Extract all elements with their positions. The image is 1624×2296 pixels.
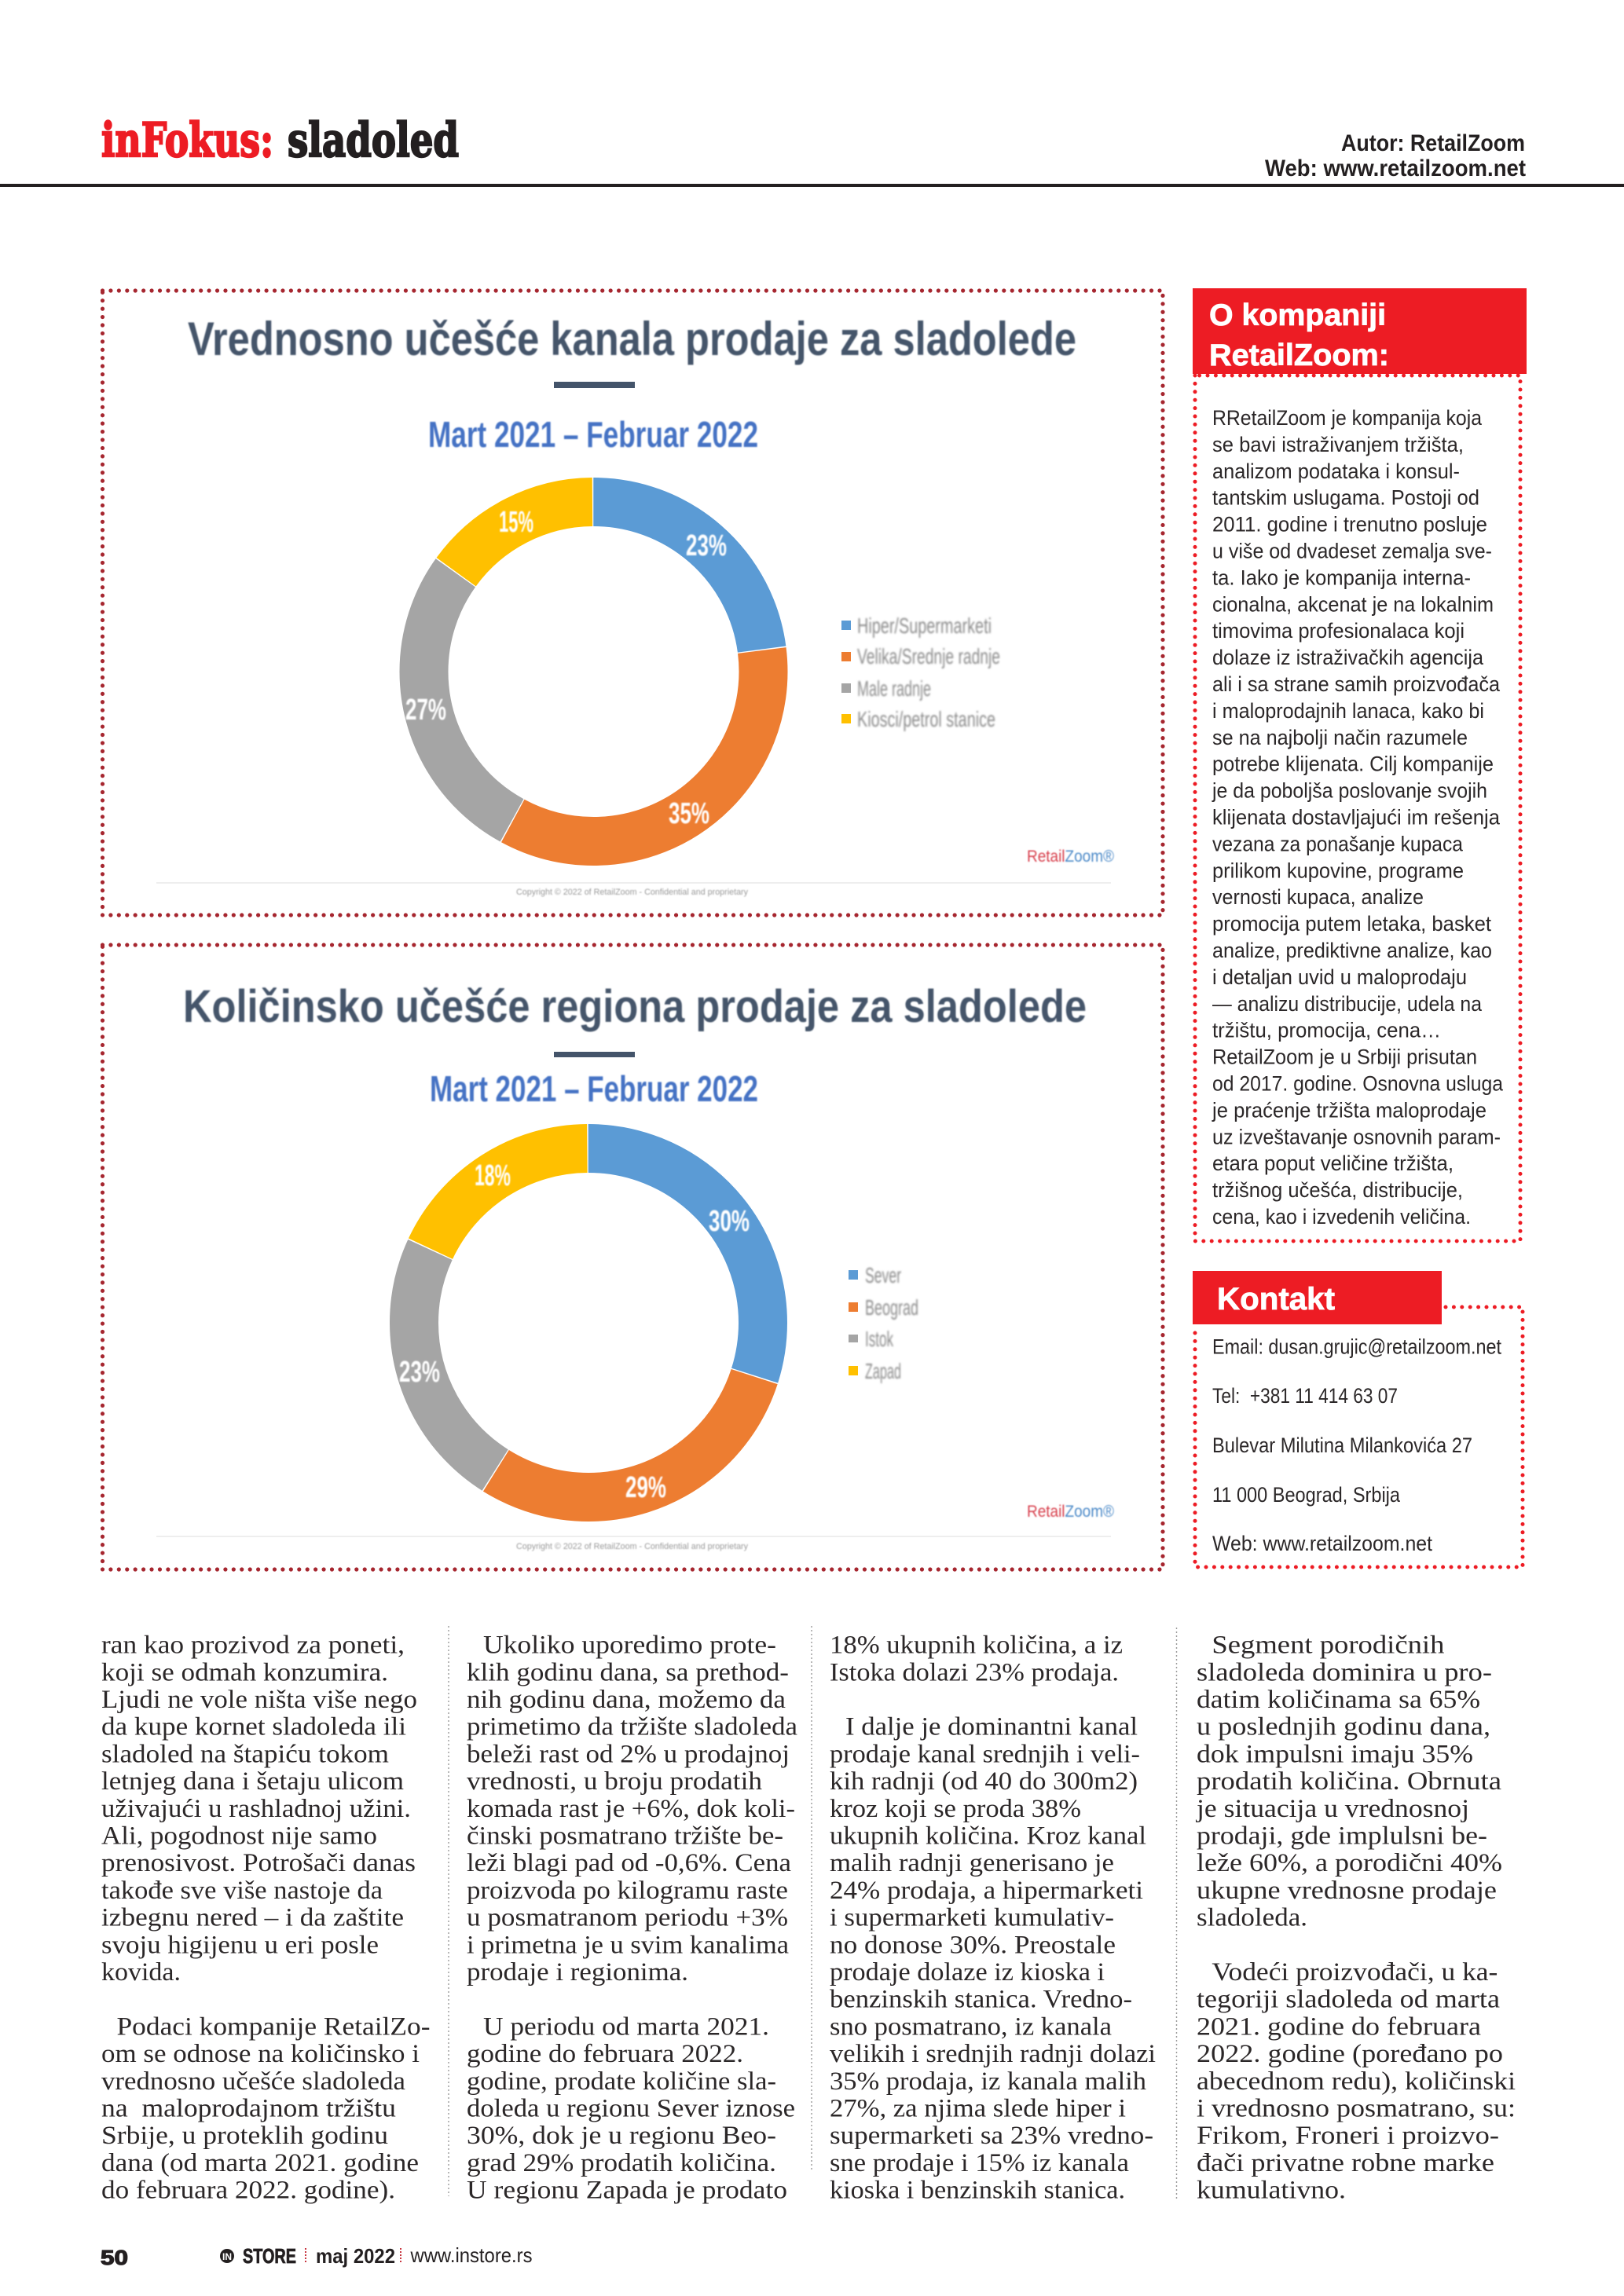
article column 4: i vrednosno posmatrano, su:	[1197, 2094, 1516, 2122]
article column 4: prodaji, gde implulsni be-	[1197, 1822, 1487, 1851]
sidebar body text: etara poput veličine tržišta,	[1212, 1152, 1454, 1175]
RetailZoom logo: RetailZoom®	[1027, 1503, 1114, 1521]
footer: publication line: STORE	[243, 2244, 296, 2268]
contact details: Bulevar Milutina Milankovića 27	[1212, 1434, 1472, 1457]
panel: volume share by region chart	[102, 945, 1163, 1569]
sidebar body text: analize, prediktivne analize, kao	[1212, 939, 1492, 962]
RetailZoom logo: RetailZoom®	[1027, 848, 1114, 866]
legend: channels: Velika/Srednje radnje	[857, 644, 1000, 668]
article column 1: kovida.	[101, 1958, 181, 1987]
article column 2: grad 29% prodatih količina.	[467, 2149, 776, 2177]
article column 1: Podaci kompanije RetailZo-	[116, 2012, 431, 2041]
copyright note: Copyright © 2022 of RetailZoom - Confidential and proprietary	[516, 888, 748, 897]
donut chart: channels	[405, 502, 764, 841]
article column 1: Srbije, u proteklih godinu	[101, 2122, 388, 2150]
article column 1: dana (od marta 2021. godine	[101, 2149, 419, 2177]
article column 1: om se odnose na količinsko i	[101, 2040, 420, 2068]
article column 4: abecednom redu), količinski	[1197, 2067, 1516, 2096]
contact details: Web: www.retailzoom.net	[1212, 1532, 1432, 1555]
sidebar body text: potrebe klijenata. Cilj kompanije	[1212, 753, 1494, 776]
article column 4: prodatih količina. Obrnuta	[1197, 1767, 1501, 1796]
article column 3: i supermarketi kumulativ-	[830, 1904, 1114, 1932]
article column 2: komada rast je +6%, dok koli-	[467, 1795, 795, 1823]
article column 2	[467, 1631, 797, 2205]
donut chart: regions	[399, 1148, 763, 1504]
sidebar heading: RetailZoom:	[1209, 339, 1389, 372]
article column 3: kroz koji se proda 38%	[830, 1795, 1081, 1823]
article column 3: Istoka dolazi 23% prodaja.	[830, 1658, 1119, 1686]
icon: IN logo: IN	[222, 2251, 232, 2262]
article column 4: kumulativno.	[1197, 2177, 1346, 2205]
donut chart: channels: 27%	[405, 694, 446, 727]
article column 1: vrednosno učešće sladoleda	[101, 2067, 405, 2096]
article column 1: letnjeg dana i šetaju ulicom	[101, 1767, 404, 1796]
sidebar body text: vernosti kupaca, analize	[1212, 885, 1424, 909]
article column 4: đači privatne robne marke	[1197, 2149, 1494, 2177]
sidebar body text: RetailZoom je u Srbiji prisutan	[1212, 1045, 1477, 1069]
article column 4: je situacija u vrednosnoj	[1196, 1795, 1469, 1823]
legend: channels	[841, 613, 1000, 731]
article column 1: da kupe kornet sladoleda ili	[101, 1713, 406, 1741]
sidebar body text: prilikom kupovine, programe	[1212, 859, 1464, 882]
sidebar body text: i detaljan uvid u maloprodaju	[1212, 965, 1467, 989]
article column 3: sne prodaje i 15% iz kanala	[830, 2149, 1129, 2177]
header: author and web credit	[1265, 130, 1526, 181]
article column 2: vrednosti, u broju prodatih	[467, 1767, 763, 1796]
sidebar body text: 2011. godine i trenutno posluje	[1212, 513, 1487, 536]
article column 4: sladoleda dominira u pro-	[1197, 1658, 1492, 1686]
header rule	[0, 184, 1624, 187]
legend: regions: Beograd	[865, 1295, 918, 1320]
donut chart: regions: 18%	[475, 1159, 511, 1192]
article column 3: 18% ukupnih količina, a iz	[830, 1631, 1123, 1660]
sidebar body text: se na najbolji način razumele	[1212, 726, 1468, 749]
panel: value share by sales channel chart	[102, 291, 1163, 915]
article column 4	[1196, 1631, 1516, 2205]
contact details: 11 000 Beograd, Srbija	[1212, 1483, 1401, 1507]
article column 2: u posmatranom periodu +3%	[467, 1904, 788, 1932]
article column 3: no donose 30%. Preostale	[830, 1931, 1116, 1959]
donut chart: channels: 23%	[686, 529, 727, 562]
contact details: Tel: +381 11 414 63 07	[1212, 1384, 1398, 1408]
sidebar heading	[1193, 288, 1527, 374]
article column 4: 2021. godine do februara	[1197, 2012, 1481, 2041]
chart title: Količinsko učešće regiona prodaje za sladolede	[183, 981, 1087, 1032]
article column 2: prodaje i regionima.	[467, 1958, 688, 1987]
sidebar body text	[1212, 406, 1504, 1229]
legend: regions: Zapad	[865, 1359, 901, 1383]
article column 2: U regionu Zapada je prodato	[467, 2177, 787, 2205]
sidebar body text: se bavi istraživanjem tržišta,	[1212, 433, 1464, 456]
article column 4: Segment porodičnih	[1212, 1631, 1445, 1660]
sidebar body text: cena, kao i izvedenih veličina.	[1212, 1205, 1471, 1229]
header: author and web credit: Web: www.retailzoom.net	[1265, 156, 1526, 181]
legend: regions	[849, 1263, 918, 1383]
article column 4: leže 60%, a porodični 40%	[1197, 1849, 1502, 1877]
article column 3: I dalje je dominantni kanal	[845, 1713, 1138, 1741]
article column 4: u poslednjih godinu dana,	[1197, 1713, 1490, 1741]
donut chart: channels: 35%	[669, 797, 709, 830]
article column 3: kih radnji (od 40 do 300m2)	[830, 1767, 1138, 1796]
article column 4: datim količinama sa 65%	[1197, 1686, 1480, 1714]
article column 2: godine, prodate količine sla-	[467, 2067, 776, 2096]
article column 2: primetimo da tržište sladoleda	[467, 1713, 797, 1741]
article column 3: velikih i srednjih radnji dolazi	[830, 2040, 1156, 2068]
article column 4: sladoleda.	[1197, 1904, 1307, 1932]
contact heading	[1193, 1271, 1442, 1324]
header: section title	[101, 113, 459, 168]
article column 4: ukupne vrednosne prodaje	[1197, 1877, 1497, 1905]
article column 2: beleži rast od 2% u prodajnoj	[467, 1740, 790, 1768]
footer: publication line	[220, 2243, 533, 2268]
article column 1: izbegnu nered – i da zaštite	[101, 1904, 404, 1932]
sidebar body text: cionalna, akcenat je na lokalnim	[1212, 592, 1494, 616]
sidebar body text: tržištu, promocija, cena…	[1212, 1019, 1441, 1042]
sidebar body text: promocija putem letaka, basket	[1212, 912, 1491, 936]
article column 1: na maloprodajnom tržištu	[101, 2094, 396, 2122]
article column 2: i primetna je u svim kanalima	[467, 1931, 789, 1959]
sidebar body text: timovima profesionalaca koji	[1212, 619, 1465, 643]
article column 2: činski posmatrano tržište be-	[467, 1822, 783, 1851]
article column 4: dok impulsni imaju 35%	[1197, 1740, 1473, 1768]
sidebar body text: vezana za ponašanje kupaca	[1212, 832, 1464, 855]
article column 1: Ljudi ne vole ništa više nego	[101, 1686, 417, 1714]
sidebar body text: je praćenje tržišta maloprodaje	[1212, 1098, 1487, 1122]
header: author and web credit: Autor: RetailZoom	[1341, 130, 1525, 156]
donut chart: regions: 29%	[625, 1471, 666, 1504]
sidebar body text: u više od dvadeset zemalja sve-	[1212, 539, 1492, 562]
article column 3: kioska i benzinskih stanica.	[830, 2177, 1125, 2205]
chart title: Vrednosno učešće kanala prodaje za sladolede	[188, 313, 1076, 365]
donut chart: channels: 15%	[499, 506, 533, 539]
sidebar: about the company	[1193, 288, 1527, 1241]
article column 4: Vodeći proizvođači, u ka-	[1212, 1958, 1498, 1987]
sidebar heading: O kompaniji	[1209, 298, 1386, 332]
article column 4: Frikom, Froneri i proizvo-	[1197, 2122, 1499, 2150]
article column 2: proizvoda po kilogramu raste	[467, 1877, 788, 1905]
article column 2: 30%, dok je u regionu Beo-	[467, 2122, 776, 2150]
legend: regions: Istok	[865, 1327, 894, 1351]
sidebar body text: ali i sa strane samih proizvođača	[1212, 672, 1501, 696]
article column 3	[830, 1631, 1156, 2205]
article column 3: malih radnji generisano je	[830, 1849, 1114, 1877]
article column 3: benzinskih stanica. Vredno-	[830, 1986, 1132, 2014]
donut chart: regions: 30%	[709, 1205, 750, 1238]
icon: IN logo	[220, 2249, 234, 2263]
article column 2: doleda u regionu Sever iznose	[467, 2094, 795, 2122]
sidebar body text: od 2017. godine. Osnovna usluga	[1212, 1071, 1504, 1095]
sidebar body text: ta. Iako je kompanija interna-	[1212, 566, 1471, 589]
sidebar: contact	[1193, 1271, 1523, 1567]
article column 3: supermarketi sa 23% vredno-	[830, 2122, 1153, 2150]
chart subtitle: Mart 2021 – Februar 2022	[430, 1068, 758, 1109]
sidebar body text: i maloprodajnih lanaca, kako bi	[1212, 699, 1484, 723]
sidebar body text: — analizu distribucije, udela na	[1212, 992, 1483, 1016]
article column 1: do februara 2022. godine).	[101, 2177, 395, 2205]
article column 1: uživajući u rashladnoj užini.	[101, 1795, 411, 1823]
sidebar body text: analizom podataka i konsul-	[1212, 460, 1460, 483]
article column 3: 35% prodaja, iz kanala malih	[830, 2067, 1147, 2096]
article column 3: sno posmatrano, iz kanala	[830, 2012, 1112, 2041]
sidebar body text: tržišnog učešća, distribucije,	[1212, 1178, 1463, 1202]
sidebar body text: je da poboljša poslovanje svojih	[1212, 779, 1487, 803]
legend: regions: Sever	[865, 1263, 901, 1287]
article column 3: 27%, za njima slede hiper i	[830, 2094, 1126, 2122]
article column 1: takođe sve više nastoje da	[101, 1877, 383, 1905]
article column 3: ukupnih količina. Kroz kanal	[830, 1822, 1146, 1851]
sidebar body text: uz izveštavanje osnovnih param-	[1212, 1125, 1501, 1148]
contact details: Email: dusan.grujic@retailzoom.net	[1212, 1335, 1501, 1359]
article column 2: godine do februara 2022.	[467, 2040, 743, 2068]
article column 1: Ali, pogodnost nije samo	[101, 1822, 377, 1851]
article column 4: 2022. godine (poređano po	[1197, 2040, 1503, 2068]
contact details	[1212, 1335, 1501, 1555]
sidebar body text: RRetailZoom je kompanija koja	[1212, 406, 1483, 430]
legend: channels: Kiosci/petrol stanice	[857, 707, 995, 731]
donut chart: regions: 23%	[399, 1356, 440, 1389]
footer: page number: 50	[101, 2246, 128, 2269]
article column 1	[101, 1631, 431, 2205]
article column 1: koji se odmah konzumira.	[101, 1658, 388, 1686]
copyright note: Copyright © 2022 of RetailZoom - Confidential and proprietary	[516, 1542, 748, 1551]
article column 2: Ukoliko uporedimo prote-	[483, 1631, 776, 1660]
contact heading: Kontakt	[1217, 1282, 1335, 1316]
chart subtitle: Mart 2021 – Februar 2022	[428, 414, 758, 455]
header: section title: sladoled	[288, 113, 459, 168]
legend: channels: Hiper/Supermarketi	[857, 613, 992, 638]
article column 2: klih godinu dana, sa prethod-	[467, 1658, 789, 1686]
footer: publication line: www.instore.rs	[410, 2243, 533, 2267]
article column 1: svoju higijenu u eri posle	[101, 1931, 379, 1959]
article column 3: prodaje dolaze iz kioska i	[830, 1958, 1105, 1987]
sidebar body text: tantskim uslugama. Postoji od	[1212, 486, 1479, 510]
article column 3: 24% prodaja, a hipermarketi	[830, 1877, 1143, 1905]
article column 1: ran kao prozivod za poneti,	[101, 1631, 405, 1660]
article column 3: prodaje kanal srednjih i veli-	[830, 1740, 1140, 1768]
legend: channels: Male radnje	[857, 676, 931, 701]
sidebar body text: dolaze iz istraživačkih agencija	[1212, 646, 1484, 669]
article column 1: prenosivost. Potrošači danas	[101, 1849, 416, 1877]
article column 1: sladoled na štapiću tokom	[101, 1740, 389, 1768]
article column 2: U periodu od marta 2021.	[483, 2012, 769, 2041]
footer: publication line: maj 2022	[316, 2244, 395, 2268]
article column 2: leži blagi pad od -0,6%. Cena	[467, 1849, 791, 1877]
sidebar body text: klijenata dostavljajući im rešenja	[1212, 806, 1501, 829]
header: section title: inFokus:	[101, 113, 273, 168]
article column 2: nih godinu dana, možemo da	[467, 1686, 786, 1714]
article column 4: tegoriji sladoleda od marta	[1197, 1986, 1500, 2014]
